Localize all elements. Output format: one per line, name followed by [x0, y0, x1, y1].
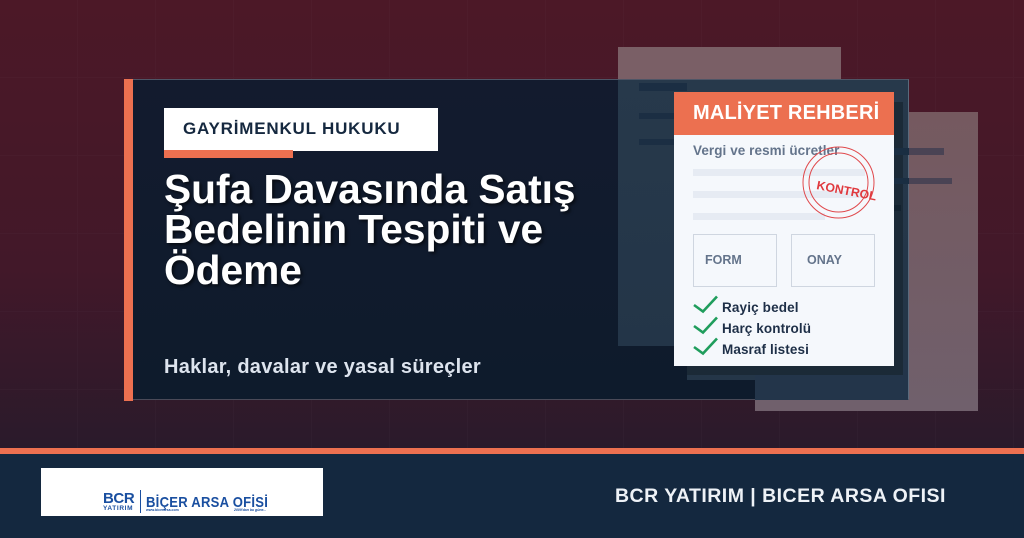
sheet line 3 seen through panel: [639, 139, 679, 145]
title: [164, 166, 576, 293]
sheet line tail 3 in shadow: [894, 205, 901, 211]
logo box: [41, 468, 323, 516]
title: Ödeme: [164, 247, 302, 293]
checklist item 3: [693, 338, 809, 357]
approval label: ONAY: [807, 253, 842, 267]
background sheet: upper document: [618, 47, 841, 346]
logo: BCR: BCR: [103, 490, 134, 507]
sheet text line 2, lower document: [909, 178, 952, 184]
approval box: [791, 234, 875, 287]
panel: main: [124, 79, 909, 400]
checklist item 2: [693, 316, 811, 336]
placeholder line 2: [693, 191, 865, 198]
category accent underline: [164, 150, 293, 158]
form label: FORM: [705, 253, 742, 267]
category text: GAYRİMENKUL HUKUKU: [183, 119, 400, 138]
footer brand text: BCR YATIRIM | BICER ARSA OFISI: [615, 485, 946, 507]
icon: check: [693, 338, 718, 356]
footer: [0, 448, 1024, 538]
sheet text line 1, lower document: [909, 148, 944, 155]
placeholder line 1: [693, 169, 865, 176]
icon: check: [693, 316, 718, 334]
card shadow: [687, 102, 903, 375]
form box: [693, 234, 777, 287]
card heading: MALİYET REHBERİ: [693, 102, 879, 124]
category label: [164, 108, 438, 151]
sheet seen through panel: middle: [687, 280, 908, 380]
icon: check: [693, 296, 718, 314]
title: Şufa Davasında Satış: [164, 166, 576, 212]
subtitle: Haklar, davalar ve yasal süreçler: [164, 356, 481, 378]
sheet line tails in shadow: [894, 148, 909, 155]
logo: web address: www.bicerarsa.com: [146, 508, 179, 512]
logo divider: [140, 490, 141, 513]
item text: Harç kontrolü: [722, 321, 811, 336]
logo: Yatırım: YATIRIM: [103, 505, 133, 512]
placeholder line 3: [693, 213, 825, 220]
item text: Rayiç bedel: [722, 300, 799, 315]
card header: [674, 92, 894, 135]
logo: name: BİÇER ARSA OFİSİ: [146, 494, 268, 510]
item text: Masraf listesi: [722, 342, 809, 357]
sheet seen through panel: upper: [618, 80, 908, 346]
card subheading: Vergi ve resmi ücretler: [693, 143, 839, 158]
panel: cost guide card: [674, 92, 894, 366]
stamp: kontrol: [802, 146, 878, 218]
stamp: kontrol: KONTROL: [815, 178, 878, 204]
sheet line tail 2 in shadow: [894, 178, 909, 184]
title: Bedelinin Tespiti ve: [164, 206, 543, 252]
accent bar: [124, 79, 133, 401]
sheet line 2 seen through panel: [639, 113, 679, 119]
sheet line 1 seen through panel: [639, 83, 687, 91]
background sheet: lower document: [755, 112, 978, 411]
checklist item 1: [693, 296, 799, 315]
sheet seen through panel: lower: [755, 360, 908, 400]
logo: tagline: 2009'dan bu güne...: [234, 508, 266, 512]
